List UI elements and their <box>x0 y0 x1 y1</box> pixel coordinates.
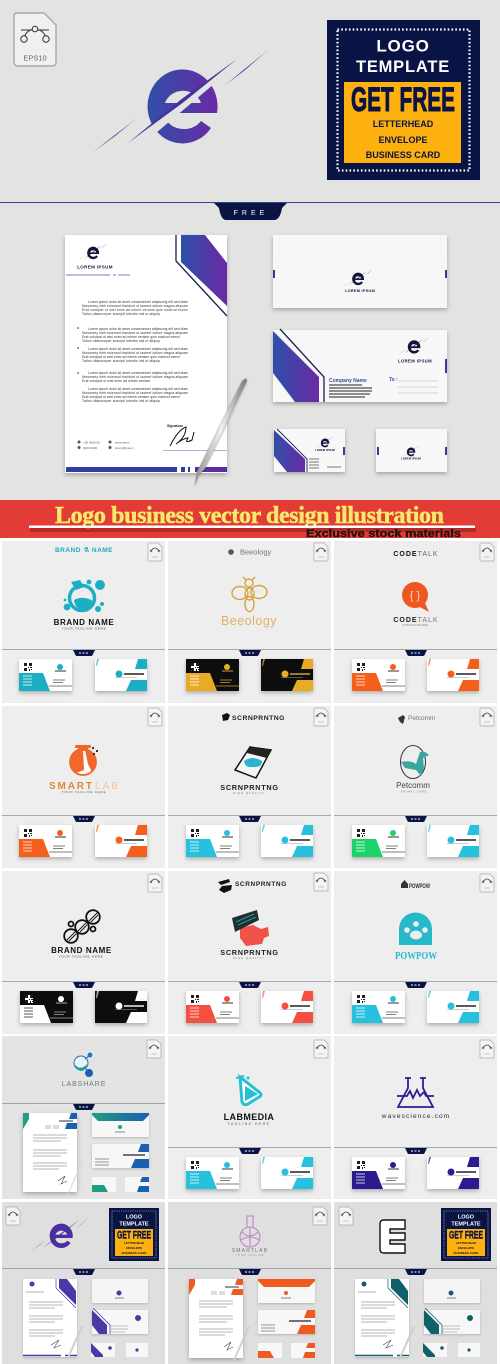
logo: DNA helix <box>64 910 100 943</box>
badge: small get free: TEMPLATE <box>451 1222 481 1228</box>
badge: small get free: TEMPLATE <box>119 1222 149 1228</box>
panel: Brand Name DNA: BRAND NAME <box>51 946 112 955</box>
panel: SCRNPRNTNG red: SCRNPRNTNG <box>235 881 287 888</box>
grid background <box>0 538 500 1364</box>
panel: CodeTalk: CODETALK <box>393 551 439 558</box>
panel: Brand Name DNA: YOUR TAGLINE HERE <box>59 954 103 958</box>
panel: SmartLab: SMART <box>49 781 92 792</box>
logo: dog in oval <box>400 746 429 778</box>
badge: small get free <box>441 1208 491 1261</box>
logo: orange brain flask <box>70 745 98 775</box>
panel: SCRNPRNTNG red: SCRNPRNTNG <box>220 948 279 957</box>
envelope back mockup <box>273 235 447 308</box>
panel: LabMedia <box>168 1036 331 1199</box>
panel: Petcomm: ANIMAL CARE <box>401 790 427 794</box>
panel: SmartLab: YOUR TAGLINE HERE <box>62 790 106 794</box>
page background <box>0 0 500 500</box>
letterhead mockup: LOREM IPSUM <box>77 264 113 270</box>
badge: logo template get free: TEMPLATE <box>356 58 450 76</box>
letterhead mockup: Nonummy nibh euismod tincidunt ut laoreet dolore magna aliquam <box>82 391 188 395</box>
panel: SCRNPRNTNG red: HIGH QUALITY <box>233 956 265 960</box>
panel: SCRNPRNTNG red <box>168 871 331 1034</box>
logo: red screen print <box>232 910 269 946</box>
logo: outlined E <box>380 1220 405 1253</box>
badge: small get free: LOGO <box>126 1214 143 1220</box>
hero logo: slashed letter e <box>93 50 268 152</box>
business card front mockup <box>274 429 345 472</box>
panel: E outline template <box>334 1202 497 1364</box>
title banner: Logo business vector design illustration <box>55 503 444 529</box>
panel: Petcomm: Petcomm <box>396 781 430 790</box>
letterhead mockup: www.lorem <box>115 440 130 444</box>
panel: WaveScience <box>334 1036 497 1199</box>
panel: SmartLab brain flask <box>168 1202 331 1364</box>
panel: Beeology: Beeology <box>221 614 277 628</box>
letterhead mockup: Nonummy nibh euismod tincidunt ut laoreet dolore magna aliquam <box>82 304 188 308</box>
letterhead mockup: Nonummy nibh euismod tincidunt ut laoreet dolore magna aliquam <box>82 351 188 355</box>
letterhead mockup: Tation ullamcorper suscipit lobortis nisl ut aliquip <box>82 312 160 316</box>
panel: WaveScience: wavescience.com <box>381 1113 450 1120</box>
logo: orange speech bubble <box>402 582 429 612</box>
panel: Brand Name teal: BRAND ⚗ NAME <box>55 546 113 554</box>
title banner: Exclusive stock materials <box>306 528 461 540</box>
letterhead mockup: Tation ullamcorper suscipit lobortis nisl ut aliquip <box>82 359 160 363</box>
letterhead mockup: Erat volutpat ut wisi enim ad minim veniam <box>82 379 150 383</box>
panel: PowPow: POWPOW <box>395 950 437 962</box>
panel: CodeTalk: YOUR TAGLINE HERE <box>402 624 428 627</box>
panel: Beeology <box>168 541 331 703</box>
letterhead mockup: lorem@ipsum <box>115 446 134 450</box>
letterhead mockup: Lorem ipsum dolor sit amet consectetuer adipiscing elit sed diam <box>88 387 188 391</box>
badge: small get free: BUSINESS CARD <box>454 1251 479 1255</box>
logo: molecule <box>74 1053 93 1077</box>
panel: SCRNPRNTNG clipboard: HIGH QUALITY <box>233 791 265 795</box>
title banner <box>0 500 500 541</box>
panel: Brand Name teal: YOUR TAGLINE HERE <box>62 626 106 630</box>
letterhead mockup: Tation ullamcorper suscipit lobortis nisl ut aliquip <box>82 339 160 343</box>
badge: small get free: GET FREE <box>117 1230 151 1242</box>
badge: small get free: LETTERHEAD <box>124 1241 145 1245</box>
panel: PowPow: POWPOW <box>409 883 431 890</box>
letterhead mockup: Erat volutpat ut wisi enim ad minim veniam quis nostrud exerci <box>82 395 180 399</box>
badge: small get free: LETTERHEAD <box>456 1241 477 1245</box>
panel: SmartLab brain flask: YOUR TAGLINE <box>236 1253 264 1257</box>
panel: Brand Name teal: BRAND NAME <box>54 618 114 627</box>
badge: small get free <box>109 1208 159 1261</box>
panel: SmartLab: LAB <box>95 781 118 792</box>
letterhead mockup: +00 0000 00 <box>83 440 100 444</box>
badge: small get free: LOGO <box>458 1214 475 1220</box>
envelope front mockup: Company Name <box>329 378 367 384</box>
envelope front mockup <box>273 329 447 402</box>
panel: LabShare stationery: LABSHARE <box>62 1081 106 1088</box>
envelope back mockup: LOREM IPSUM <box>345 289 375 293</box>
logo: paw badge <box>399 912 432 945</box>
badge: logo template get free: BUSINESS CARD <box>366 150 441 160</box>
logo: play flask <box>236 1076 261 1105</box>
business card front mockup: LOREM IPSUM <box>315 448 336 452</box>
logo: orange speech bubble: { } <box>410 590 421 602</box>
panel: SCRNPRNTNG clipboard <box>168 706 331 868</box>
icon: EPS10 file badge: EPS10 <box>23 54 47 62</box>
letterhead mockup <box>65 235 227 473</box>
letterhead mockup: Nonummy nibh euismod tincidunt ut laoreet dolore magna aliquam <box>82 331 188 335</box>
letterhead mockup: Lorem ipsum dolor sit amet consectetuer adipiscing elit sed diam <box>88 371 188 375</box>
logo: flask with wave <box>397 1078 434 1107</box>
logo: purple brain flask <box>240 1216 260 1247</box>
panel: e logo template <box>2 1202 165 1364</box>
logo: screen print frame <box>235 747 271 778</box>
panel: LabMedia: LABMEDIA <box>224 1112 274 1122</box>
logo: teal flask <box>64 580 105 612</box>
business card back mockup: LOREM IPSUM <box>401 456 422 460</box>
letterhead mockup: Lorem ipsum dolor sit amet consectetuer adipiscing elit sed diam <box>88 327 188 331</box>
letterhead mockup: Erat volutpat ut wisi enim ad minim veniam quis nostrud exerci <box>82 355 180 359</box>
badge: small get free: BUSINESS CARD <box>122 1251 147 1255</box>
divider with FREE tab <box>0 202 500 220</box>
panel: SmartLab <box>2 706 165 868</box>
panel: CodeTalk <box>334 541 497 703</box>
panel: SCRNPRNTNG clipboard: SCRNPRNTNG <box>232 715 285 722</box>
badge: logo template get free: ENVELOPE <box>378 135 428 145</box>
business card back mockup <box>376 429 447 472</box>
panel: CodeTalk: CODETALK <box>393 617 439 624</box>
panel: LabShare stationery <box>2 1036 165 1199</box>
logo: bee <box>232 577 267 612</box>
badge: small get free: ENVELOPE <box>126 1246 142 1250</box>
letterhead mockup: Lorem ipsum dolor sit amet consectetuer adipiscing elit sed diam <box>88 300 188 304</box>
letterhead mockup: Signature <box>167 424 183 428</box>
badge: small get free: ENVELOPE <box>458 1246 474 1250</box>
panel: PowPow <box>334 871 497 1034</box>
panel: Brand Name teal <box>2 541 165 703</box>
badge: logo template get free: LOGO <box>376 36 430 56</box>
icon: EPS10 file badge <box>14 13 56 66</box>
letterhead mockup: Nonummy nibh euismod tincidunt ut laoreet dolore magna aliquam <box>82 375 188 379</box>
panel: Petcomm <box>334 706 497 868</box>
panel: Brand Name DNA <box>2 871 165 1034</box>
panel: SCRNPRNTNG clipboard: SCRNPRNTNG <box>220 783 279 792</box>
letterhead mockup: Lorem ipsum dolor sit amet consectetuer adipiscing elit sed diam <box>88 347 188 351</box>
letterhead mockup: Erat volutpat ut wisi enim ad minim veniam quis nostrud exerci <box>82 335 180 339</box>
logo: small e <box>32 1217 89 1251</box>
badge: logo template get free: LETTERHEAD <box>373 119 434 129</box>
panel: Petcomm: Petcomm <box>408 715 435 722</box>
letterhead mockup: 0000 0000 <box>83 446 98 450</box>
envelope front mockup: LOREM IPSUM <box>398 358 432 364</box>
letterhead mockup: Erat volutpat ut wisi enim ad minim veniam quis nostrud exerci <box>82 308 188 312</box>
letterhead mockup: Tation ullamcorper suscipit lobortis nisl ut aliquip <box>82 399 160 403</box>
icon: silver pen <box>195 378 247 485</box>
envelope front mockup: To : <box>389 377 398 383</box>
panel: SmartLab brain flask: SMARTLAB <box>232 1248 268 1254</box>
panel: LabMedia: TAGLINE HERE <box>228 1122 270 1126</box>
panel: Beeology: Beeology <box>240 548 272 556</box>
divider with FREE tab: FREE <box>234 210 268 217</box>
badge: logo template get free <box>327 20 480 180</box>
